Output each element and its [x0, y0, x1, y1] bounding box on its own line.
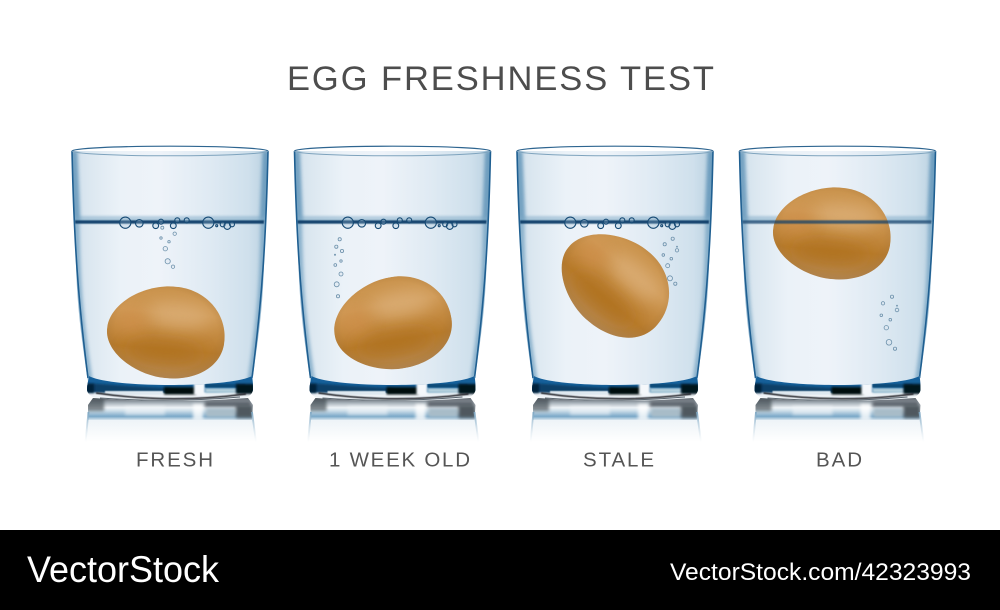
footer bar [0, 530, 1000, 610]
glass: bad [740, 146, 936, 404]
rising bubbles [880, 295, 899, 350]
label: fresh: FRESH [136, 448, 213, 472]
label: stale: STALE [583, 448, 654, 472]
rising bubbles [662, 237, 679, 285]
egg: bad, floating at the surface [766, 180, 898, 286]
egg: fresh, resting flat on the bottom [100, 279, 232, 385]
label: 1 week old: 1 WEEK OLD [329, 448, 470, 472]
glass: stale [517, 146, 713, 404]
glass reflection: bad [752, 396, 924, 442]
footer image id: VectorStock.com/42323993 [670, 559, 971, 586]
egg: 1 week old, tilting upward [323, 265, 462, 382]
title: EGG FRESHNESS TEST [287, 60, 714, 98]
rising bubbles [334, 238, 344, 298]
glass reflection: fresh [85, 396, 257, 442]
glass reflection: stale [530, 396, 702, 442]
footer brand: VectorStock [27, 549, 219, 590]
egg: stale, standing at an angle [537, 207, 693, 360]
rising bubbles [160, 226, 176, 268]
glass: 1 week old [294, 146, 490, 404]
water line across the floating egg [742, 220, 932, 224]
label: bad: BAD [816, 448, 862, 472]
glass: fresh [72, 146, 268, 404]
glass reflection: 1 week old [308, 396, 480, 442]
